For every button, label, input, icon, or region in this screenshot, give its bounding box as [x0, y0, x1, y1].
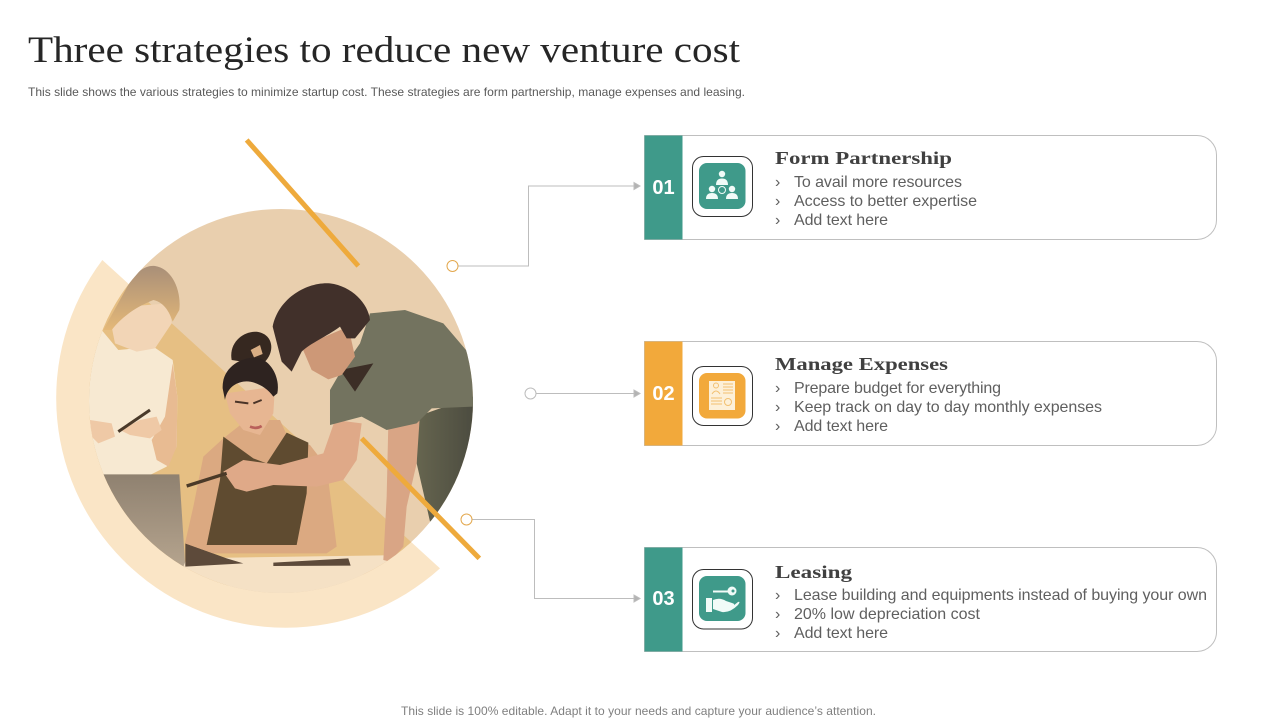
card 2: manage expenses — [644, 342, 1216, 446]
heading: Form Partnership — [775, 148, 952, 168]
left arm pointing — [223, 420, 362, 492]
bullets: › — [775, 625, 780, 642]
bullets: Add text here — [794, 212, 888, 229]
number band 02 — [644, 342, 682, 446]
heading: Leasing — [775, 562, 852, 582]
pants — [417, 397, 473, 522]
bullets: Access to better expertise — [794, 193, 977, 210]
card 3: leasing — [644, 548, 1216, 652]
laptop — [103, 474, 185, 567]
connector 3 — [461, 514, 640, 602]
bun — [231, 332, 271, 363]
right arm — [383, 413, 420, 562]
bullets: 20% low depreciation cost — [794, 606, 981, 623]
face — [225, 387, 275, 435]
image: team around a laptop in a circle — [56, 140, 479, 628]
icon: hand with key — [692, 570, 752, 629]
bullets — [775, 174, 977, 229]
bullets: › — [775, 193, 780, 210]
icon: team network — [692, 156, 752, 216]
table — [184, 555, 394, 593]
woman left — [87, 266, 180, 475]
bullets: › — [775, 212, 780, 229]
connector 1 — [447, 182, 640, 272]
bullets: Lease building and equipments instead of buying your own — [794, 587, 1207, 604]
icon: document — [692, 366, 752, 426]
dress — [207, 433, 308, 545]
hair — [273, 283, 370, 372]
bullets: › — [775, 418, 780, 435]
bullets: To avail more resources — [794, 174, 962, 191]
bullets: › — [775, 587, 780, 604]
bullets: Prepare budget for everything — [794, 380, 1001, 397]
face — [302, 327, 355, 379]
bullets — [775, 380, 1102, 435]
neck and shoulders — [185, 420, 337, 553]
number band 01 — [644, 136, 682, 240]
hair — [103, 266, 180, 330]
bullets: › — [775, 399, 780, 416]
bullets — [775, 587, 1207, 642]
face — [112, 303, 172, 352]
connector 2 — [525, 388, 640, 399]
subtitle: This slide shows the various strategies to minimize startup cost. These strategies are form partnership, manage expenses and leasing. — [28, 85, 745, 99]
number band 02: 02 — [652, 383, 675, 405]
heading: Manage Expenses — [775, 354, 948, 374]
bullets: › — [775, 380, 780, 397]
number band 03 — [644, 548, 682, 652]
hair — [223, 358, 278, 400]
bullets: Keep track on day to day monthly expenses — [794, 399, 1102, 416]
title: Three strategies to reduce new venture cost — [28, 30, 741, 71]
number band 03: 03 — [652, 588, 675, 610]
bullets: › — [775, 174, 780, 191]
bullets: Add text here — [794, 625, 888, 642]
man — [187, 283, 473, 562]
hands — [90, 417, 162, 443]
arm — [152, 363, 177, 467]
footer note: This slide is 100% editable. Adapt it to your needs and capture your audience’s attention. — [401, 704, 876, 718]
bullets: Add text here — [794, 418, 888, 435]
pencil — [187, 473, 227, 486]
dress — [87, 330, 177, 475]
photo circle — [87, 207, 477, 603]
pale segment backdrop — [56, 260, 440, 628]
shirt — [330, 310, 473, 430]
lower darker triangle of wall — [89, 284, 411, 586]
orange line lower — [362, 438, 479, 558]
orange line upper — [247, 140, 358, 266]
woman centre — [185, 332, 337, 553]
card 1: form partnership — [644, 136, 1216, 240]
pencil — [118, 410, 150, 432]
number band 01: 01 — [652, 177, 675, 199]
bullets: › — [775, 606, 780, 623]
